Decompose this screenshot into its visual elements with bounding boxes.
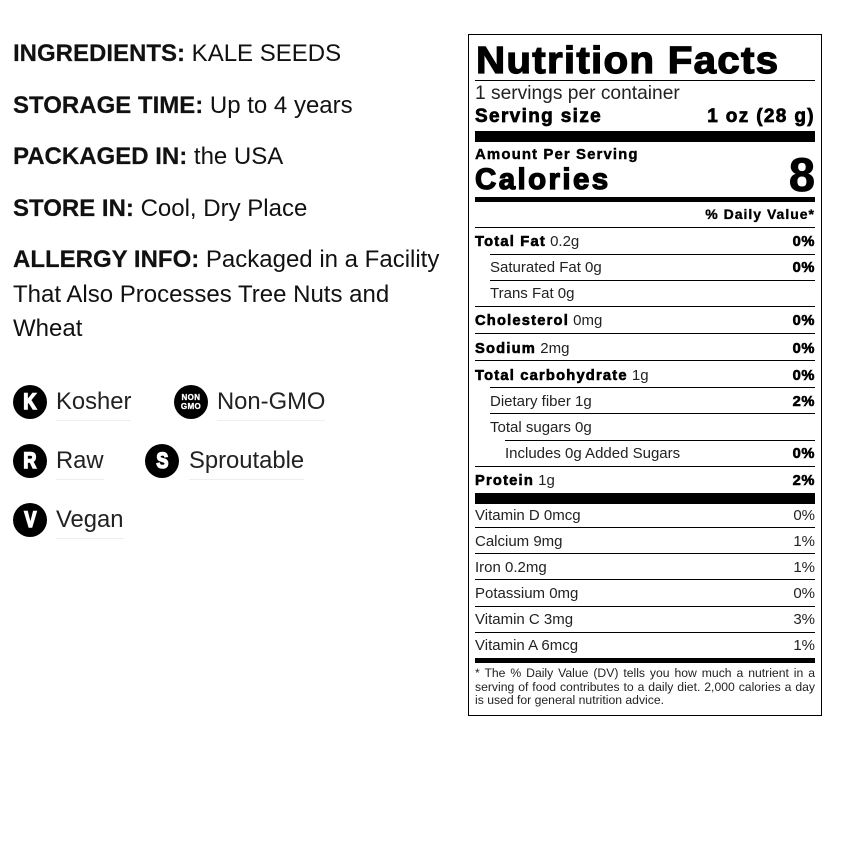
allergy info block: That Also Processes Tree Nuts and	[13, 280, 389, 308]
icon: raw: R	[23, 448, 37, 473]
row: trans fat: Trans Fat 0g	[490, 285, 574, 302]
row: dietary fiber	[490, 393, 815, 410]
row: saturated fat: 0%	[793, 260, 815, 276]
row: saturated fat: Saturated Fat 0g	[490, 259, 602, 276]
row: cholesterol: Cholesterol 0mg	[475, 312, 602, 329]
row: total carbohydrate: Total carbohydrate 1g	[475, 367, 649, 384]
row: added sugars: 0%	[793, 446, 815, 462]
row: iron: 1%	[793, 559, 815, 576]
row: sodium: Sodium 2mg	[475, 340, 569, 357]
label: sproutable: Sproutable	[189, 447, 304, 474]
label: raw: Raw	[56, 447, 104, 474]
row: cholesterol	[475, 312, 815, 329]
allergy info block: ALLERGY INFO: Packaged in a Facility	[13, 246, 439, 273]
label: kosher: Kosher	[56, 388, 131, 415]
row: potassium	[475, 585, 815, 602]
row: total sugars: Total sugars 0g	[490, 419, 592, 436]
packaged in line: PACKAGED IN: the USA	[13, 143, 283, 170]
icon: vegan: V	[24, 507, 36, 532]
row: vitamin c: 3%	[793, 611, 815, 628]
icon: kosher	[13, 385, 47, 419]
row: cholesterol: 0%	[793, 313, 815, 329]
row: total carbohydrate	[474, 367, 815, 384]
row: vitamin a: Vitamin A 6mcg	[475, 637, 578, 654]
heading: nutrition facts: Nutrition Facts	[476, 40, 779, 82]
row: vitamin c	[475, 611, 815, 628]
row: protein: 2%	[793, 473, 815, 489]
icon: kosher: K	[23, 389, 37, 414]
calories: Calories	[475, 163, 611, 196]
footnote: * The % Daily Value (DV) tells you how much a nutrient in a serving of food contributes to a daily diet. 2,000 calories a day is used for general nutrition advice.	[475, 666, 815, 707]
row: dietary fiber: 2%	[793, 394, 815, 410]
daily value header: % Daily Value*	[705, 206, 815, 222]
panel: nutrition facts label	[468, 34, 822, 716]
row: vitamin d: 0%	[793, 507, 815, 524]
row: protein: Protein 1g	[475, 472, 555, 489]
row: total fat: 0%	[793, 234, 815, 250]
row: total fat	[474, 233, 815, 250]
row: saturated fat	[490, 259, 815, 276]
row: dietary fiber: Dietary fiber 1g	[490, 393, 592, 410]
row: total carbohydrate: 0%	[793, 368, 815, 384]
row: vitamin d	[475, 507, 815, 524]
row: iron	[475, 559, 815, 576]
icon: non-gmo	[174, 385, 208, 419]
row: added sugars	[505, 445, 815, 462]
store in line: STORE IN: Cool, Dry Place	[13, 195, 307, 222]
row: total fat: Total Fat 0.2g	[475, 233, 579, 250]
icon: raw	[13, 444, 47, 478]
label: non-gmo: Non-GMO	[217, 388, 325, 415]
servings per container: 1 servings per container	[475, 83, 680, 104]
label: vegan: Vegan	[56, 506, 124, 533]
serving size	[475, 106, 815, 127]
row: potassium: 0%	[793, 585, 815, 602]
icon: non-gmo: GMO	[181, 402, 201, 411]
icon: vegan	[13, 503, 47, 537]
row: vitamin d: Vitamin D 0mcg	[475, 507, 581, 524]
allergy info block	[13, 246, 440, 342]
serving size: 1 oz (28 g)	[707, 106, 815, 127]
row: added sugars: Includes 0g Added Sugars	[505, 445, 680, 462]
storage time line: STORAGE TIME: Up to 4 years	[13, 92, 353, 119]
allergy info block: Wheat	[13, 315, 82, 342]
icon: non-gmo: NON	[182, 393, 200, 402]
row: sodium	[475, 340, 815, 357]
icon: sproutable	[145, 444, 179, 478]
ingredients line: INGREDIENTS: KALE SEEDS	[13, 40, 341, 67]
row: vitamin a: 1%	[793, 637, 815, 654]
serving size: Serving size	[475, 106, 602, 127]
amount per serving: Amount Per Serving	[475, 146, 639, 163]
calories value: 8	[789, 148, 815, 201]
row: sodium: 0%	[793, 341, 815, 357]
row: protein	[475, 472, 815, 489]
row: vitamin a	[475, 637, 815, 654]
row: calcium	[475, 533, 815, 550]
row: vitamin c: Vitamin C 3mg	[475, 611, 573, 628]
row: calcium: Calcium 9mg	[475, 533, 563, 550]
icon: sproutable: S	[156, 448, 168, 473]
row: iron: Iron 0.2mg	[475, 559, 547, 576]
row: potassium: Potassium 0mg	[475, 585, 578, 602]
row: calcium: 1%	[793, 533, 815, 550]
